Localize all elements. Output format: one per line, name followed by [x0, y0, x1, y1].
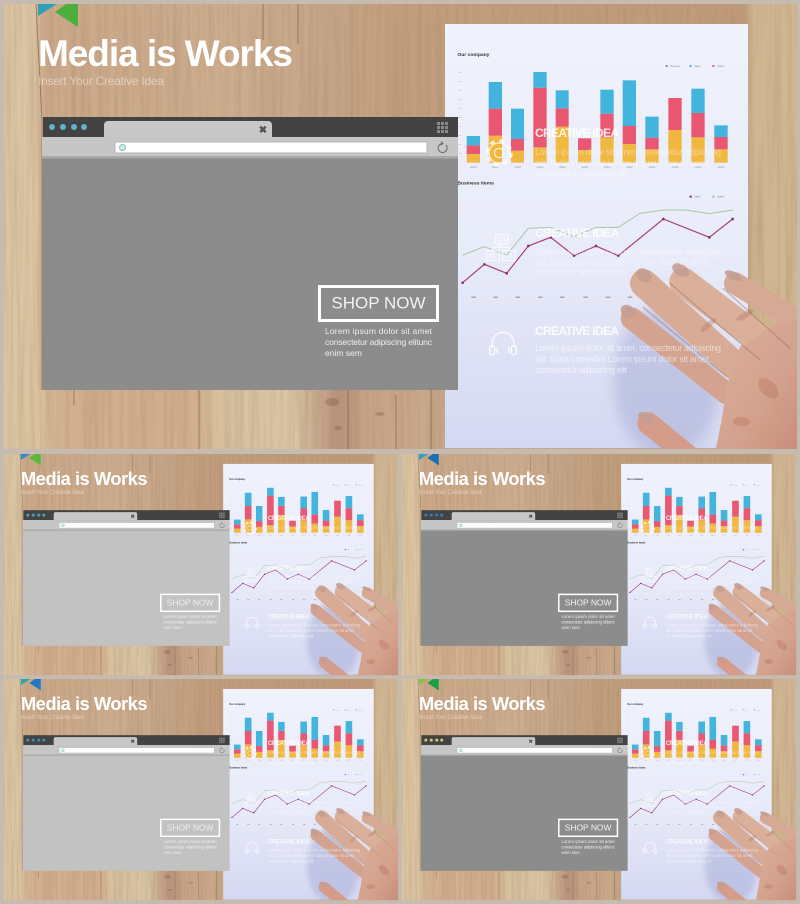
- shop now text: consectetur adipiscing elitunc: [325, 337, 433, 347]
- title: Media is Works: [38, 33, 293, 74]
- panel: thumbnail light browser, bottom left: CREATIVE IDEA: [268, 741, 310, 747]
- panel: thumbnail light browser, bottom left: Media is Works: [21, 693, 148, 714]
- shop now button: [320, 286, 438, 320]
- icon: ribbon logo: [38, 4, 78, 27]
- feature: creative idea 3: consectetur adipiscing elit: [535, 365, 627, 375]
- icon: gear: [487, 141, 511, 165]
- panel: thumbnail dark browser, top right: Insert Your Creative Idea: [419, 490, 482, 496]
- panel: thumbnail dark browser, bottom right: SHOP NOW: [565, 822, 612, 832]
- panel: thumbnail dark browser, bottom right: Lorem ipsum dolor sit amet, consectetur adipiscing: [666, 750, 759, 755]
- feature: creative idea 2: consectetur adipiscing elit: [535, 267, 627, 277]
- panel: thumbnail dark browser, bottom right: CREATIVE IDEA: [666, 839, 708, 845]
- panel: thumbnail light browser, top left: CREATIVE IDEA: [268, 516, 310, 522]
- panel: thumbnail dark browser, top right: consectetur adipiscing elitunc: [562, 619, 615, 624]
- feature: creative idea 1: consectetur adipiscing elit: [535, 168, 627, 178]
- panel: thumbnail light browser, bottom left: enim sem: [164, 850, 182, 855]
- browser window: [42, 117, 458, 390]
- panel: thumbnail light browser, bottom left: Lorem ipsum dolor sit amet, consectetur adipiscing: [268, 750, 361, 755]
- feature: creative idea 1: CREATIVE IDEA: [535, 126, 619, 140]
- panel: thumbnail light browser, top left: elit. Nulla imperdiet Lorem ipsum dolor sit amet,: [268, 531, 355, 536]
- panel: thumbnail dark browser, bottom right: Lorem ipsum dolor sit amet, consectetur adipiscing: [666, 800, 759, 805]
- panel: thumbnail dark browser, bottom right: consectetur adipiscing elit: [666, 760, 712, 765]
- panel: thumbnail light browser, bottom left: Insert Your Creative Idea: [21, 715, 84, 721]
- panel: thumbnail light browser, top left: CREATIVE IDEA: [268, 614, 310, 620]
- feature: creative idea 3: [535, 324, 721, 375]
- subtitle: Insert Your Creative Idea: [38, 74, 164, 88]
- panel: thumbnail dark browser, top right: Lorem ipsum dolor sit amet, consectetur adipiscing: [666, 622, 759, 627]
- panel: thumbnail dark browser, bottom right: [400, 677, 799, 904]
- panel: thumbnail dark browser, top right: enim sem: [562, 625, 580, 630]
- feature: creative idea 1: [536, 128, 720, 168]
- panel: main slide: [0, 0, 800, 460]
- panel: thumbnail light browser, top left: consectetur adipiscing elitunc: [164, 619, 217, 624]
- panel: thumbnail light browser, bottom left: elit. Nulla imperdiet Lorem ipsum dolor sit amet,: [268, 853, 355, 858]
- feature: creative idea 1: Lorem ipsum dolor sit amet, consectetur adipiscing: [535, 147, 721, 157]
- panel: thumbnail light browser, bottom left: CREATIVE IDEA: [268, 839, 310, 845]
- panel: thumbnail dark browser, bottom right: Lorem ipsum dolor sit amet, consectetur adipiscing: [666, 847, 759, 852]
- panel: thumbnail dark browser, bottom right: Insert Your Creative Idea: [419, 715, 482, 721]
- panel: thumbnail dark browser, bottom right: elit. Nulla imperdiet Lorem ipsum dolor sit amet,: [666, 756, 753, 761]
- panel: thumbnail light browser, bottom left: SHOP NOW: [167, 822, 214, 832]
- panel: thumbnail light browser, top left: Insert Your Creative Idea: [21, 490, 84, 496]
- panel: thumbnail dark browser, top right: CREATIVE IDEA: [666, 516, 708, 522]
- panel: thumbnail dark browser, top right: consectetur adipiscing elit: [666, 585, 712, 590]
- feature: creative idea 3: Lorem ipsum dolor sit amet, consectetur adipiscing: [535, 343, 721, 353]
- panel: thumbnail dark browser, top right: elit. Nulla imperdiet Lorem ipsum dolor sit amet,: [666, 531, 753, 536]
- panel: thumbnail dark browser, bottom right: consectetur adipiscing elit: [666, 810, 712, 815]
- icon: headphones: [490, 332, 516, 355]
- panel: thumbnail light browser, top left: consectetur adipiscing elit: [268, 633, 314, 638]
- panel: thumbnail dark browser, top right: Lorem ipsum dolor sit amet, consectetur adipiscing: [666, 575, 759, 580]
- panel: thumbnail dark browser, top right: Media is Works: [419, 468, 546, 489]
- panel: thumbnail dark browser, top right: CREATIVE IDEA: [666, 614, 708, 620]
- panel: thumbnail dark browser, bottom right: elit. Nulla imperdiet Lorem ipsum dolor sit amet,: [666, 805, 753, 810]
- icon: monitors: [487, 235, 515, 261]
- panel: thumbnail dark browser, top right: SHOP NOW: [565, 597, 612, 607]
- panel: thumbnail light browser, top left: consectetur adipiscing elit: [268, 585, 314, 590]
- feature: creative idea 2: CREATIVE IDEA: [535, 226, 619, 240]
- panel: thumbnail light browser, bottom left: consectetur adipiscing elit: [268, 810, 314, 815]
- panel: thumbnail dark browser, bottom right: Lorem ipsum dolor sit amet: [562, 839, 616, 844]
- panel: thumbnail dark browser, top right: consectetur adipiscing elit: [666, 633, 712, 638]
- panel: thumbnail light browser, top left: elit. Nulla imperdiet Lorem ipsum dolor sit amet,: [268, 580, 355, 585]
- panel: thumbnail dark browser, bottom right: enim sem: [562, 850, 580, 855]
- panel: thumbnail dark browser, top right: [400, 452, 799, 681]
- panel: thumbnail light browser, top left: Lorem ipsum dolor sit amet, consectetur adipiscing: [268, 622, 361, 627]
- panel: thumbnail light browser, bottom left: consectetur adipiscing elit: [268, 858, 314, 863]
- feature: creative idea 2: [535, 226, 721, 277]
- feature: creative idea 2: Lorem ipsum dolor sit amet, consectetur adipiscing: [535, 247, 721, 257]
- feature: creative idea 2: elit. Nulla imperdiet Lorem ipsum dolor sit amet,: [535, 257, 711, 267]
- panel: thumbnail dark browser, bottom right: elit. Nulla imperdiet Lorem ipsum dolor sit amet,: [666, 853, 753, 858]
- panel: thumbnail dark browser, top right: consectetur adipiscing elit: [666, 535, 712, 540]
- shop now text: [325, 328, 432, 356]
- panel: thumbnail dark browser, top right: CREATIVE IDEA: [666, 566, 708, 572]
- panel: thumbnail light browser, bottom left: consectetur adipiscing elitunc: [164, 844, 217, 849]
- panel: thumbnail light browser, top left: SHOP NOW: [167, 597, 214, 607]
- panel: thumbnail light browser, top left: elit. Nulla imperdiet Lorem ipsum dolor sit amet,: [268, 628, 355, 633]
- feature: creative idea 1: elit. Nulla imperdiet Lorem ipsum dolor sit amet,: [535, 158, 711, 168]
- panel: thumbnail light browser, top left: enim sem: [164, 625, 182, 630]
- panel: thumbnail dark browser, bottom right: CREATIVE IDEA: [666, 791, 708, 797]
- shop now text: enim sem: [325, 348, 362, 358]
- panel: thumbnail dark browser, bottom right: consectetur adipiscing elitunc: [562, 844, 615, 849]
- panel: thumbnail light browser, bottom left: elit. Nulla imperdiet Lorem ipsum dolor sit amet,: [268, 805, 355, 810]
- shop now button: SHOP NOW: [331, 294, 426, 312]
- panel: thumbnail dark browser, bottom right: consectetur adipiscing elit: [666, 858, 712, 863]
- panel: thumbnail light browser, bottom left: elit. Nulla imperdiet Lorem ipsum dolor sit amet,: [268, 756, 355, 761]
- panel: thumbnail dark browser, bottom right: CREATIVE IDEA: [666, 741, 708, 747]
- panel: thumbnail dark browser, top right: elit. Nulla imperdiet Lorem ipsum dolor sit amet,: [666, 628, 753, 633]
- panel: thumbnail dark browser, top right: Lorem ipsum dolor sit amet, consectetur adipiscing: [666, 525, 759, 530]
- panel: thumbnail light browser, top left: consectetur adipiscing elit: [268, 535, 314, 540]
- panel: thumbnail light browser, top left: Media is Works: [21, 468, 148, 489]
- panel: thumbnail light browser, top left: Lorem ipsum dolor sit amet, consectetur adipiscing: [268, 525, 361, 530]
- panel: thumbnail light browser, top left: [2, 452, 401, 681]
- panel: thumbnail dark browser, bottom right: Media is Works: [419, 693, 546, 714]
- panel: thumbnail dark browser, top right: Lorem ipsum dolor sit amet: [562, 614, 616, 619]
- panel: thumbnail light browser, bottom left: Lorem ipsum dolor sit amet, consectetur adipiscing: [268, 847, 361, 852]
- shop now text: Lorem ipsum dolor sit amet: [325, 326, 433, 336]
- panel: thumbnail light browser, bottom left: [2, 677, 401, 904]
- panel: thumbnail dark browser, top right: elit. Nulla imperdiet Lorem ipsum dolor sit amet,: [666, 580, 753, 585]
- panel: thumbnail light browser, top left: Lorem ipsum dolor sit amet: [164, 614, 218, 619]
- panel: thumbnail light browser, bottom left: CREATIVE IDEA: [268, 791, 310, 797]
- panel: thumbnail light browser, top left: Lorem ipsum dolor sit amet, consectetur adipiscing: [268, 575, 361, 580]
- panel: thumbnail light browser, bottom left: Lorem ipsum dolor sit amet: [164, 839, 218, 844]
- feature: creative idea 3: CREATIVE IDEA: [535, 324, 619, 338]
- panel: thumbnail light browser, top left: CREATIVE IDEA: [268, 566, 310, 572]
- panel: thumbnail light browser, bottom left: consectetur adipiscing elit: [268, 760, 314, 765]
- panel: thumbnail light browser, bottom left: Lorem ipsum dolor sit amet, consectetur adipiscing: [268, 800, 361, 805]
- feature: creative idea 3: elit. Nulla imperdiet Lorem ipsum dolor sit amet,: [535, 354, 711, 364]
